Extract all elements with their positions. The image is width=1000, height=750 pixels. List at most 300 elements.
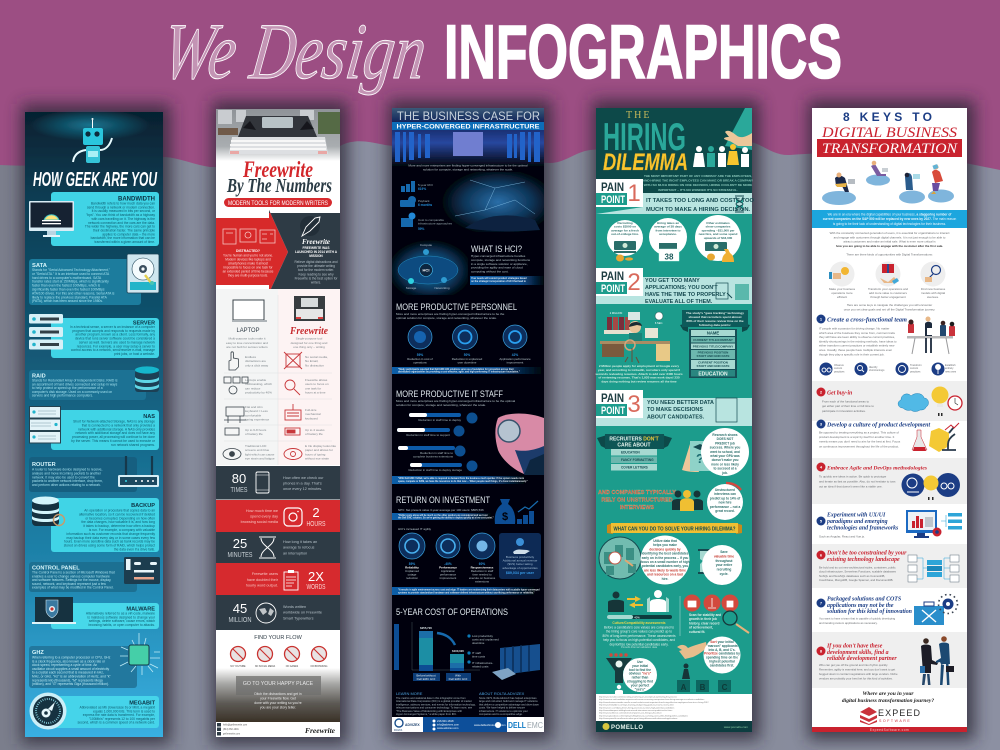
references: http://www.recruiter.com/i/recruiting-and-hiring-an-example-of-optimizing-the-process <box>599 696 677 698</box>
icons: team practices: current <box>910 366 918 370</box>
footer: pomello: www.pomello.com <box>724 725 748 729</box>
card: tracking study: PREVIOUS POSITION <box>698 350 728 354</box>
bars: staff reductions: Reduction in staff time to <box>420 451 453 455</box>
captions: three opportunities: Make your business <box>829 287 856 291</box>
card: router: A router is hardware device designed to receive, <box>32 468 102 472</box>
key 3: product development: Develop a culture of product development <box>826 422 930 428</box>
comparison: laptop column: Laptops enable <box>245 378 266 382</box>
card: GHz: is a clock frequency, also known as a clock rate or <box>32 659 106 663</box>
panel: freewrite mission dark: tool for the modern writer. <box>298 268 334 272</box>
card: business productivity: Business productivity <box>506 555 535 559</box>
panel: distracted red arrow: impossible to focus on one task for <box>223 266 273 270</box>
card: server: program that accepts and responds to requests made by <box>72 329 155 333</box>
comparison: freewrite column: Full-size <box>305 408 317 412</box>
callout: grades: job. <box>721 471 728 475</box>
about rolta text: companies and to a competitive edge. <box>479 712 523 716</box>
card: GHz: When referring to a computer processor or CPU, GHz <box>32 656 111 660</box>
what is HCI: computing without the cost. <box>471 270 509 274</box>
chart: 5-year cost bars: IT infrastructure- <box>472 661 493 665</box>
card: server: SERVER <box>133 320 155 326</box>
intro paragraph: THE MOST IMPORTANT PART OF ANY COMPANY ARE THE EMPLOYEES, <box>644 174 752 178</box>
heading: the business case for: THE BUSINESS CASE FOR <box>397 109 540 123</box>
card: server <box>51 318 159 358</box>
gauges: personnel: Reduction in cost of <box>407 357 433 361</box>
references: http://www.inc.com/data-driven-hiring-practices-to-retain-high-potential-candidates <box>599 706 674 709</box>
text: unstructured interviews: RELY ON UNSTRUCTURED <box>601 498 673 504</box>
pain point 2 label: PAIN <box>601 269 624 283</box>
scene: recruiter at desk: 2 MILLION <box>610 311 622 315</box>
card: RAID: servers and high performance computers. <box>32 394 93 398</box>
key 1: cross-functional team: IT people with a passion for driving change. No matter <box>819 326 889 330</box>
text: unstructured interviews: AND COMPANIES TYPICALLY <box>598 490 676 496</box>
icons: team practices: practices <box>834 369 845 373</box>
callout: grades: success. Where you <box>710 446 740 450</box>
text: google applications: year, and according to LinkedIn, recruiters only spend 6 <box>598 368 680 372</box>
references <box>596 694 752 721</box>
card: RAID: Stands for Redundant Array of Independent Disks. RAID is <box>32 378 118 382</box>
card: GHz: clock speed, representing a cycle of time. An <box>32 663 97 667</box>
gauges: personnel: Reduction in unplanned <box>452 357 483 361</box>
closing question: Where are you in your <box>862 691 914 697</box>
card: SATA: hard drives to a computer's motherboard. SATA <box>32 276 102 280</box>
intro text: More and more enterprises are finding hyper-converged infrastructure to be the optimal <box>408 164 528 168</box>
icon: hand with degree <box>682 441 710 472</box>
text: intro paragraph: and engage with customers through digital channels. It is not just enough to be able to <box>834 235 946 239</box>
icons: team practices: entirely <box>945 366 954 370</box>
comparison: freewrite column: No social media, <box>305 355 328 359</box>
intro paragraph: AND HIRING THE RIGHT EMPLOYEES CAN MAKE OR BREAK A COMPANY <box>643 179 754 183</box>
card: recruiters don't care: FANCY FORMATTING <box>621 458 654 462</box>
card: server: control access to a network, send/receive e-mail, manage <box>71 348 155 352</box>
key 1: cross-functional team: identify shortcomings in the existing methods, have ideas to <box>819 339 897 343</box>
band: intro highlight: We are in an era where the digital capabilities of your business, a staggering number of <box>828 212 951 216</box>
quote band 1: "Study participants reported that Dell EMC HCI solutions serve as a foundation for innovation across their <box>398 368 514 371</box>
card: megabit: express the rate data is transferred. For example, <box>83 713 155 717</box>
footer: freewrite contact <box>216 722 340 737</box>
pain point 2 band <box>596 277 752 305</box>
icon: money bag and chart <box>495 499 538 524</box>
card: router: ROUTER <box>32 462 56 468</box>
stats: ROI payback cost: 5-year ROI <box>418 183 433 187</box>
key 8: development partner <box>812 632 967 688</box>
text: culture assessments <box>602 621 676 649</box>
references: http://www.businessinsider.com/hr-reveals-whats-most-important-how-hiring-effective-employees-how-to-cv-hiring-2012 <box>599 701 709 704</box>
card: router: packets to another network interface, drop them, <box>32 479 103 483</box>
panel: distracted red arrow: they are multi-purpose tools. <box>228 274 268 278</box>
card: recruiters don't care: CARE ABOUT <box>617 442 651 448</box>
illustration: handshake <box>920 636 954 685</box>
card: tracking study: START AND END DATE <box>697 364 729 368</box>
key 3: product development: merely means you don't need to aim for the best at first. Focus <box>819 440 901 444</box>
captions: three opportunities: Transform your operations and <box>868 287 908 291</box>
icon: speed gauge <box>30 692 66 730</box>
card: tracking study <box>680 310 750 378</box>
key 6: technology landscape <box>812 544 967 588</box>
banner: what can you do <box>607 523 742 534</box>
comparison: laptop column: Multi-purpose tools make it <box>229 336 266 340</box>
pain point 1 band: IT TAKES TOO LONG AND COSTS TOO <box>646 198 754 204</box>
gauges: agility: Responsiveness <box>471 566 494 570</box>
chart: 5-year cost bars: downtime <box>472 641 485 645</box>
card: backup: alternative location, so it can be recovered if deleted <box>79 512 155 516</box>
closing question: digital business transformation journey? <box>842 698 934 704</box>
intro text: solution for compute, storage and networking, whatever the scale. <box>423 168 513 172</box>
callout: find the no: obvious "no's" <box>629 672 651 676</box>
footer: pomello <box>596 721 752 732</box>
comparison: laptop column: screens emit blue <box>245 448 270 452</box>
panel: freewrite mission dark: provide the ultimate writing <box>297 264 335 268</box>
footer: advizex and dell emc: 216.901.1818 <box>437 719 454 723</box>
bars: staff reductions: complete business extensions <box>413 454 453 458</box>
card: malware: browsing habits, or open computer to attacks. <box>88 623 155 627</box>
panel: distracted red arrow: an extended period of time because <box>223 270 274 274</box>
heading: the: THE <box>626 110 651 121</box>
what is HCI: WHAT IS HCI? <box>471 244 522 254</box>
card: recruiters don't care <box>597 434 672 470</box>
comparison: laptop column: typing experience <box>245 418 270 422</box>
stat band: 25 minutes: How long it takes an <box>283 540 317 544</box>
stat band: 25 minutes: average to refocus <box>283 546 315 550</box>
photo: data center <box>392 108 544 166</box>
card: SATA: or "Serial ATA." It is an interface used to connect ATA <box>32 272 110 276</box>
pain point 3 label <box>596 390 643 418</box>
panel: freewrite mission dark: Freewrite is the best option for <box>295 276 338 280</box>
icon: hand with ABC boxes <box>677 642 731 692</box>
key 1: cross-functional team: Create a cross-functional team <box>827 316 907 324</box>
gauges: personnel: operations <box>413 360 427 364</box>
card: backup: information such as customer records that change frequently <box>66 532 155 536</box>
card: backup: An operation or procedure that copies data to an <box>84 508 155 512</box>
diagram: HCI: HCI <box>423 268 429 272</box>
logo: expeed software <box>860 707 921 725</box>
text: scan for stability: cultural fit. <box>689 630 705 634</box>
callout: find the no: rather than <box>632 676 648 680</box>
stat band: 2 hours <box>216 500 340 532</box>
stat band: 2 hours: 2 <box>312 505 320 520</box>
stat band: 2x words: Freewrite users <box>252 572 278 576</box>
banner: transformation: TRANSFORMATION <box>822 141 958 157</box>
pain point 1 label: 1 <box>627 180 641 207</box>
icons: team practices: Identify <box>869 365 878 369</box>
callout: sort candidates <box>704 636 740 674</box>
pain point 2 label: 2 <box>627 269 641 296</box>
text: agility: HCI's increased IT agility <box>398 527 432 531</box>
card: SATA: (PATA), which has been around since the 1980s. <box>32 299 103 303</box>
about rolta text: costs. We have helped to deliver secure <box>479 706 526 710</box>
references: http://www.ere.net/candidate-experience/resume-screening-comparison-how-hiring-managers-evaluate-candidates <box>599 698 704 701</box>
key 7: packaged solutions: and iterating custom applications as necessary. <box>819 621 878 625</box>
text: google applications: of reviewing resumes. That's 1,920 man work days! 230 <box>598 376 680 380</box>
gauges: agility: Unplanned <box>405 569 419 573</box>
diagram: HCI: Compute <box>420 243 432 247</box>
callout: save time: your entire <box>716 563 732 567</box>
heading: Freewrite: Freewrite <box>242 157 313 182</box>
icon: three red badges <box>684 594 738 612</box>
photo: happy place: done with your writing so you're <box>254 701 302 705</box>
key 5: UX/UI: Experiment with UX/UI <box>826 512 886 518</box>
card: tracking study: following data points: <box>699 323 731 327</box>
gauges: agility: reduction <box>406 576 418 580</box>
comparison: freewrite column: Freewrite allows <box>305 378 328 382</box>
chart: 5-year cost bars: $255,720 <box>420 626 432 630</box>
card: GHz: to a crystal each second that is measured in kHz, <box>32 671 104 675</box>
icons: team practices: practices <box>910 369 921 373</box>
comparison: laptop column: easy to lose concentration and <box>226 341 268 345</box>
footer: freewrite contact: Freewrite <box>305 726 336 735</box>
comparison: laptop column: of battery life <box>245 432 263 436</box>
text: scan for stability: Scan for stability and <box>689 613 721 617</box>
gauges: personnel: Application performance <box>499 357 531 361</box>
key 1: cross-functional team: 1 <box>820 316 823 322</box>
icon: laptop <box>232 300 267 322</box>
card: megabit: Abbreviated as Mb (lowercase b) or Mbit, a megabit <box>80 706 155 710</box>
image: server cabinet <box>492 644 540 680</box>
stat circles: recruiting costs: average for a fresh <box>611 228 639 232</box>
card: router <box>29 457 137 492</box>
icon: backup database <box>32 496 64 526</box>
callout: data decisions: are less likely to waste time <box>644 568 686 572</box>
stat band: 2x words: have doubled their <box>247 578 279 582</box>
title <box>158 7 842 96</box>
card: recruiters don't care: EDUCATION <box>621 450 640 454</box>
key 2: get buy-in: get either part of their time or full time to <box>822 404 874 408</box>
quote band 2: "With Dell EMC VxRail, we're able to respond to demand from the business much quicker. If the system needs more <box>398 477 525 480</box>
about rolta text: ABOUT ROLTA ADVIZEX <box>479 691 525 696</box>
stat band: 80 times: once every 12 minutes. <box>283 487 322 491</box>
stats: ROI payback cost <box>400 181 453 231</box>
find your flow: FIND YOUR FLOW <box>254 635 303 641</box>
learn more text <box>396 691 476 716</box>
pain point 2 band: APPLICATIONS; YOU DON'T <box>645 285 718 291</box>
footer: expeed red bar: ExpeedSoftware.com <box>870 728 909 732</box>
card: NAS: network with additional storage and does not have any <box>75 431 155 435</box>
card: megabit: second, which is a common speed of a network card. <box>77 721 155 725</box>
what is HCI: Your needs will commit product strategies based <box>471 277 527 280</box>
learn more text: Hyper-Converged Systems," a white paper from IDC. <box>396 712 457 716</box>
card: server: In a technical sense, a server is an instance of a computer <box>70 325 156 329</box>
icon: candidates swap <box>607 590 672 619</box>
icon: hand with ABC boxes: B <box>700 683 706 692</box>
captions: three opportunities: models with digital <box>921 291 945 295</box>
photo: happy place: your Freewrite flow. Get <box>260 696 296 700</box>
pain point 3 band <box>596 398 752 426</box>
stat circles: recruiting costs: out-of-college hire. <box>611 232 639 236</box>
bars: staff reductions: Reduction in staff time to support <box>406 433 450 437</box>
image: hand with stopwatch <box>495 414 544 475</box>
stat band: 45 million: Smart Typewriters <box>283 616 314 620</box>
card: bandwidth <box>51 192 159 246</box>
panel: freewrite mission dark: FREEWRITE WAS <box>303 246 329 250</box>
diagram: HCI: Storage <box>406 286 417 290</box>
key 1: cross-functional team: though they play a specific role in their current job. <box>819 352 885 356</box>
quote band 1: distributed organizations by providing a cost-effective, agile, and high-performing IT infrastructure foundation." <box>398 371 520 374</box>
title script: We Design: We Design <box>158 7 432 96</box>
stat circles: recruiting costs: 38 <box>665 252 674 262</box>
comparison: freewrite column: users to focus on <box>305 382 329 386</box>
panel: freewrite mission dark: LAUNCHED IN 2014 WITH A <box>295 250 338 254</box>
heading: By The Numbers: By The Numbers <box>226 175 332 197</box>
band: intro highlight: is going to be their lack of understanding of digital technologies for their business. <box>833 222 946 226</box>
callout: save time: cycle. <box>720 572 729 576</box>
card: bandwidth: bandwidth, the more information that can be <box>91 236 155 240</box>
chart: 5-year cost bars: time costs <box>472 654 486 658</box>
pain point 1 label: POINT <box>601 194 625 206</box>
icon: hourglass cash: $ <box>704 564 708 571</box>
text: culture assessments: 80% of long-term performance. These assessments <box>602 634 676 638</box>
icon: hand with ABC boxes: A <box>681 683 687 692</box>
banner: hyper-converged: HYPER-CONVERGED INFRASTRUCTURE <box>396 125 540 131</box>
text: scan for stability: history, clear record <box>689 621 719 625</box>
references: http://www.glassdoor.com/employers/blog/how-to-cut-hiring-costs-while-finding-better-candidates <box>599 714 688 717</box>
footer: advizex and dell emc: DELL <box>508 721 526 730</box>
heading: digital business: DIGITAL BUSINESS <box>821 125 958 141</box>
key 6: technology landscape: Don't be too constrained by your <box>826 550 907 556</box>
find your flow: NO YOUTUBE <box>230 666 246 668</box>
card: backup: stored on drives using some form of RAID, which helps protect <box>64 544 155 548</box>
comparison: freewrite column: without eye strain <box>305 457 329 461</box>
card: router: and perform other actions relating to a network. <box>32 483 101 487</box>
comparison: laptop column: light which can cause <box>245 452 275 456</box>
gauges: agility: Application <box>441 569 455 573</box>
comparison: laptop column: distractions are <box>245 359 266 363</box>
callout: grades: Research shows <box>712 433 738 437</box>
key 7: packaged solutions: solution for this kind of innovation <box>826 609 912 615</box>
icon: funnel <box>606 653 632 694</box>
stats: ROI payback cost: 59% <box>418 227 425 231</box>
key 6: technology landscape: 6 <box>820 552 823 558</box>
stat band: 2x words <box>216 563 340 595</box>
chart: 5-year cost bars: related costs <box>472 664 489 668</box>
card: backup: is run. For example, a company with valuable <box>89 528 155 532</box>
stat band: 2x words: WORDS <box>306 584 326 591</box>
card: server: resources. For example, a user may setup a server to <box>77 344 155 348</box>
footer: advizex and dell emc: ADVIZEX <box>405 723 420 727</box>
icon: toolbox and gear <box>914 594 958 625</box>
key 1: cross-functional team: either transform current practices or establish entirely new <box>819 344 895 348</box>
callout: save time: Save <box>720 550 728 554</box>
callout: data decisions: potential candidates early, you <box>642 564 688 568</box>
gauges: personnel: 42% <box>512 353 518 357</box>
quote band 4: "It results in agile environment across cost and edge. IT leaders are modernizing their datacenters with scalable hyper-converged <box>398 588 540 592</box>
text: culture assessments: the hiring group's core values can predict up to <box>606 630 672 634</box>
what is HCI: on the strategic incorporation of HCI that lead to <box>471 280 527 283</box>
pain point 3 band: YOU NEED BETTER DATA <box>647 400 714 406</box>
pain point 1 band: MUCH TO MAKE A HIRING DECISION. <box>646 207 751 213</box>
logo: expeed software: SOFTWARE <box>879 719 911 723</box>
stat circles: recruiting costs: new hire, and some spend <box>699 232 737 236</box>
comparison: laptop column: keyboard = Less <box>245 409 268 413</box>
key 3: product development: on continuous improvement throughout the life of the product. <box>819 444 899 448</box>
panel: 8 Keys to Digital Business Transformation <box>812 108 967 732</box>
gauges: agility: improvement <box>440 576 457 580</box>
quote band 4: systems to provide standardized hardware and software-defined infrastructure without sacrificing performance or reliability." <box>398 591 535 594</box>
icons: team practices: shortcomings <box>869 368 885 372</box>
key 4: agile and devops: To quickly see ideas in action. Be quick to prototype <box>819 474 887 478</box>
icon: monitor dashboard <box>906 510 962 538</box>
card: tracking study: EDUCATION <box>698 372 728 378</box>
card: tracking study: NAME <box>707 330 719 336</box>
heading: hiring: HIRING <box>603 116 686 159</box>
captions: three opportunities: Find new business <box>921 287 946 291</box>
callout: find the no: struggling to find <box>627 680 653 684</box>
key 1: cross-functional team <box>816 314 907 356</box>
text: culture assessments: Pomello internal validation data <box>621 645 658 649</box>
band: intro highlight: current companies on the S&P 500 will be replaced by new ones by 2027. The main reason <box>823 217 956 221</box>
text: scan for stability: of achievement, <box>689 626 713 630</box>
footer: expeed red bar <box>812 727 967 732</box>
comparison: freewrite column: No distraction <box>305 363 324 367</box>
key 8: development partner: vendors are probably your best bet for this kind of activities. <box>819 676 893 680</box>
icon: hard drive <box>127 254 159 293</box>
icons: team practices: new ones <box>945 370 957 373</box>
heading: more productive personnel: MORE PRODUCTIVE PERSONNEL <box>396 302 517 312</box>
key 2: get buy-in: participate in innovation activities. <box>822 409 866 413</box>
illustration: people on clouds <box>822 161 954 205</box>
panel: distracted red arrow: smartphones make it almost <box>228 262 268 266</box>
image: network hand <box>442 172 544 232</box>
key 2: get buy-in: From each of the functional areas to <box>822 400 869 404</box>
comparison: freewrite column: paper and allows for <box>305 448 333 452</box>
footer: advizex and dell emc: www.delltechnologies.com <box>474 723 506 727</box>
callout: 14 percent: great record. <box>715 509 735 513</box>
key 2: get buy-in: 2 <box>820 390 823 394</box>
gauges: agility: execute on business <box>469 576 496 580</box>
bars: staff reductions: Reduction in staff time to deploy storage <box>409 468 462 472</box>
panel: Freewrite By The Numbers <box>216 109 340 737</box>
stats: ROI payback cost: 6 months <box>418 203 432 207</box>
icon: hand and figures <box>693 131 752 167</box>
key 5: UX/UI: 5 <box>820 518 823 524</box>
quote band 2 <box>392 476 528 484</box>
callout: grades: PREDICT job <box>715 441 735 445</box>
comparison: laptop column: comfortable <box>245 413 261 417</box>
callout: data decisions <box>640 536 690 584</box>
callout: find the no: Use <box>637 660 643 664</box>
photo: happy place <box>216 668 340 722</box>
card: recruiters don't care: COVER LETTERS <box>621 466 648 470</box>
footer: pomello: POMELLO <box>611 725 643 731</box>
key 5: UX/UI: technologies and frameworks <box>827 525 899 531</box>
icon: processor chip <box>120 633 160 675</box>
callout: save time: recruiting <box>717 568 731 572</box>
icon: monitor <box>29 201 74 237</box>
card: malware: Alternatively referred to as a virt-code, malware <box>86 612 155 616</box>
footer: freewrite contact: (844) 352-1001 <box>223 729 239 731</box>
what is HCI: Hyper-converged infrastructure bundles <box>471 254 526 258</box>
comparison: freewrite column: No Email, <box>305 359 319 363</box>
find your flow: NO BROWSING <box>311 666 328 668</box>
card: backup: the data changes, how valuable it is, and how long <box>81 520 155 524</box>
chart: 5-year cost bars <box>394 622 499 681</box>
comparison: laptop column: Flat and slim <box>245 405 263 409</box>
callout: grades: to succeed at a <box>713 467 737 471</box>
find your flow: NO SOCIAL MEDIA <box>255 665 276 668</box>
chart: 5-year cost bars: Before/without <box>416 674 436 678</box>
callout: find the no <box>623 658 657 692</box>
card: megabit <box>51 696 159 728</box>
pain point 1 label <box>596 179 643 207</box>
card: bandwidth: BANDWIDTH <box>118 196 155 202</box>
icon: robot <box>73 118 112 163</box>
logo: expeed software: EXPEED <box>878 708 921 718</box>
callout: 14 percent <box>707 483 743 520</box>
heading: return on investment: RETURN ON INVESTMENT <box>396 495 490 505</box>
card: GHz: represents kilo (thousand), "M" represents Mega <box>32 678 103 682</box>
key 8: development partner: Who can get you off the ground and into rhythm quickly. <box>819 663 888 667</box>
stat band: 2x words: hourly word output. <box>246 584 278 588</box>
chart: 5-year cost bars: IT staff <box>472 651 481 655</box>
card: SATA: significantly faster than even the fastest 100MBps <box>32 288 105 292</box>
